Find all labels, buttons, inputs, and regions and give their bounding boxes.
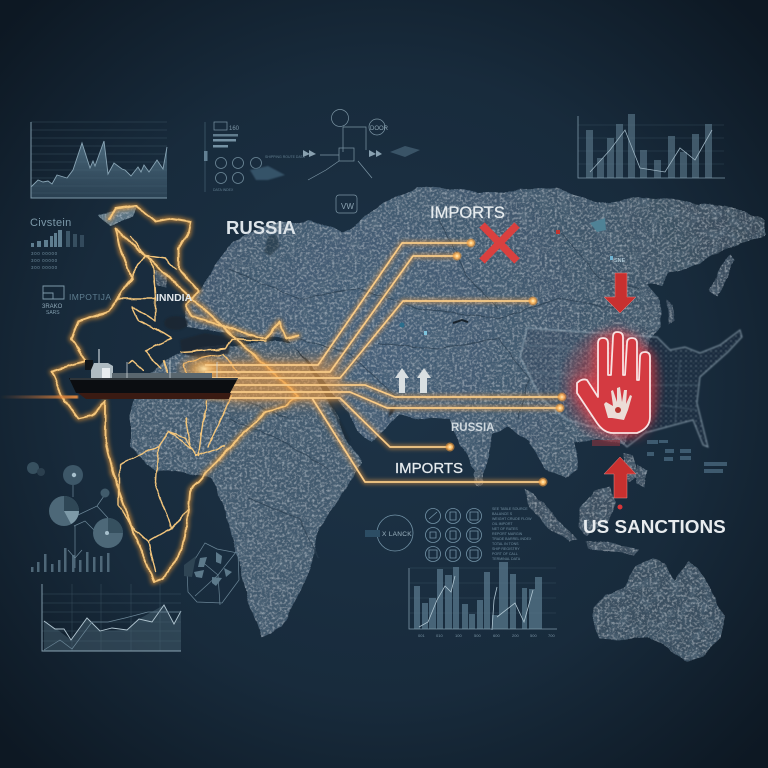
icon: red stop hand — [558, 325, 666, 445]
arrow: red up arrow — [604, 457, 636, 498]
icons: white up arrows — [395, 368, 431, 393]
panel: imports label block — [42, 286, 111, 316]
panel: bottom-centre icon grid and text: SHIP REGISTRY — [492, 547, 520, 551]
panel: imports label block: 3RAKO — [42, 304, 63, 310]
panel: bottom-centre icon grid and text: TERMINAL DATA — [492, 557, 521, 561]
chart: bottom-centre bars: 001 — [418, 633, 425, 638]
chart: bottom-centre bars: 100 — [455, 633, 462, 638]
route end dots — [447, 240, 565, 485]
panel: left stats block: Civstein — [30, 217, 72, 229]
label: India: INNDIA — [156, 292, 193, 304]
chart: bottom-centre bars: 010 — [436, 633, 443, 638]
panel: left stats block: 300 00000 — [31, 258, 58, 263]
label: Russia small: RUSSIA — [451, 422, 494, 434]
land: Eurasia — [187, 190, 768, 482]
panel: top-centre schematic icons: 160 — [229, 126, 240, 132]
panel: bottom-centre icon grid and text: SEE TABLE SOURCE — [492, 507, 528, 511]
map markers: SNE — [614, 258, 626, 264]
trail: ship wake — [0, 396, 78, 398]
label: imports top: IMPORTS — [430, 204, 505, 222]
panel: bottom-centre icon grid and text: X LANCK — [382, 531, 412, 538]
panel: bottom-centre icon grid and text: TRADE BARREL INDEX — [492, 537, 532, 541]
panel: bottom-centre icon grid and text: PORT OF CALL — [492, 552, 518, 556]
arrow: red down arrow — [604, 273, 636, 313]
chart: small bar chart — [31, 548, 110, 572]
dark inland seas — [164, 234, 396, 442]
chart: top-left area chart — [31, 122, 167, 198]
land: Australia — [595, 560, 728, 664]
panel: top-centre schematic icons: VW — [341, 202, 354, 211]
panel: left stats block: 300 00000 — [31, 265, 58, 270]
diagram: pie and network nodes — [27, 462, 123, 568]
India outline: glow — [53, 207, 300, 583]
chart: bottom-left line chart — [42, 584, 181, 651]
glow flare at ship bow — [175, 351, 340, 404]
icon: red X — [482, 225, 517, 261]
chart: bottom-centre bars: 200 — [512, 633, 519, 638]
India outline: core line — [53, 207, 300, 583]
label: imports lower: IMPORTS — [395, 460, 463, 477]
schematic: flow diagram — [308, 110, 385, 213]
panel: bottom-centre icon grid and text — [365, 507, 532, 562]
icon: oil tanker ship — [69, 349, 238, 399]
panel: left stats block: 300 00000 — [31, 251, 58, 256]
panel: bottom-centre icon grid and text: WEIGHT CRUDE FLOW — [492, 517, 532, 521]
panel: bottom-centre icon grid and text: REPORT MARGIN — [492, 532, 523, 536]
panel: top-centre schematic icons: DATA INDEX — [213, 188, 234, 192]
panel: bottom-centre icon grid and text: OIL IMPORT — [492, 522, 513, 526]
map: United States overlay — [520, 328, 742, 447]
panel: bottom-centre icon grid and text: TOTAL IN TONS — [492, 542, 519, 546]
chart: top-right bar chart — [578, 114, 725, 178]
label: Russia: RUSSIA — [226, 217, 296, 238]
chart: bottom-centre bars: 500 — [530, 633, 537, 638]
land: islands — [100, 208, 738, 558]
glowing India outline — [53, 207, 300, 583]
country borders — [190, 220, 640, 560]
panel: bottom-centre icon grid and text: BALANCE S — [492, 512, 513, 516]
panel: imports label block: IMPOTIJA — [69, 292, 111, 302]
label: US sanctions: US SANCTIONS — [583, 517, 726, 538]
panel: top-centre schematic icons: DOOR — [370, 126, 389, 132]
panel: imports label block: SARS — [46, 310, 60, 316]
land: Africa — [133, 345, 365, 640]
panel: left stats block — [30, 217, 84, 270]
chart: bottom-centre bars: 500 — [474, 633, 481, 638]
route lines: core — [205, 243, 562, 482]
panel: top-centre schematic icons: SHIPPING ROUTE DATA — [265, 155, 305, 159]
route lines: glow — [205, 243, 562, 482]
panel: bottom-centre icon grid and text: NET OF RATES — [492, 527, 518, 531]
map markers — [400, 218, 626, 510]
panel: top-centre schematic icons — [204, 110, 420, 213]
icon: small hand inside palm — [604, 387, 632, 420]
panel: right side data chips — [592, 440, 727, 473]
chart: bottom-centre bars: 600 — [493, 633, 500, 638]
trade route lines — [205, 240, 565, 485]
chart: bottom-centre bars: 700 — [548, 633, 555, 638]
world map landmasses — [100, 190, 768, 664]
diagram: radial network — [184, 543, 239, 605]
chart: bottom-centre bars — [409, 562, 557, 638]
